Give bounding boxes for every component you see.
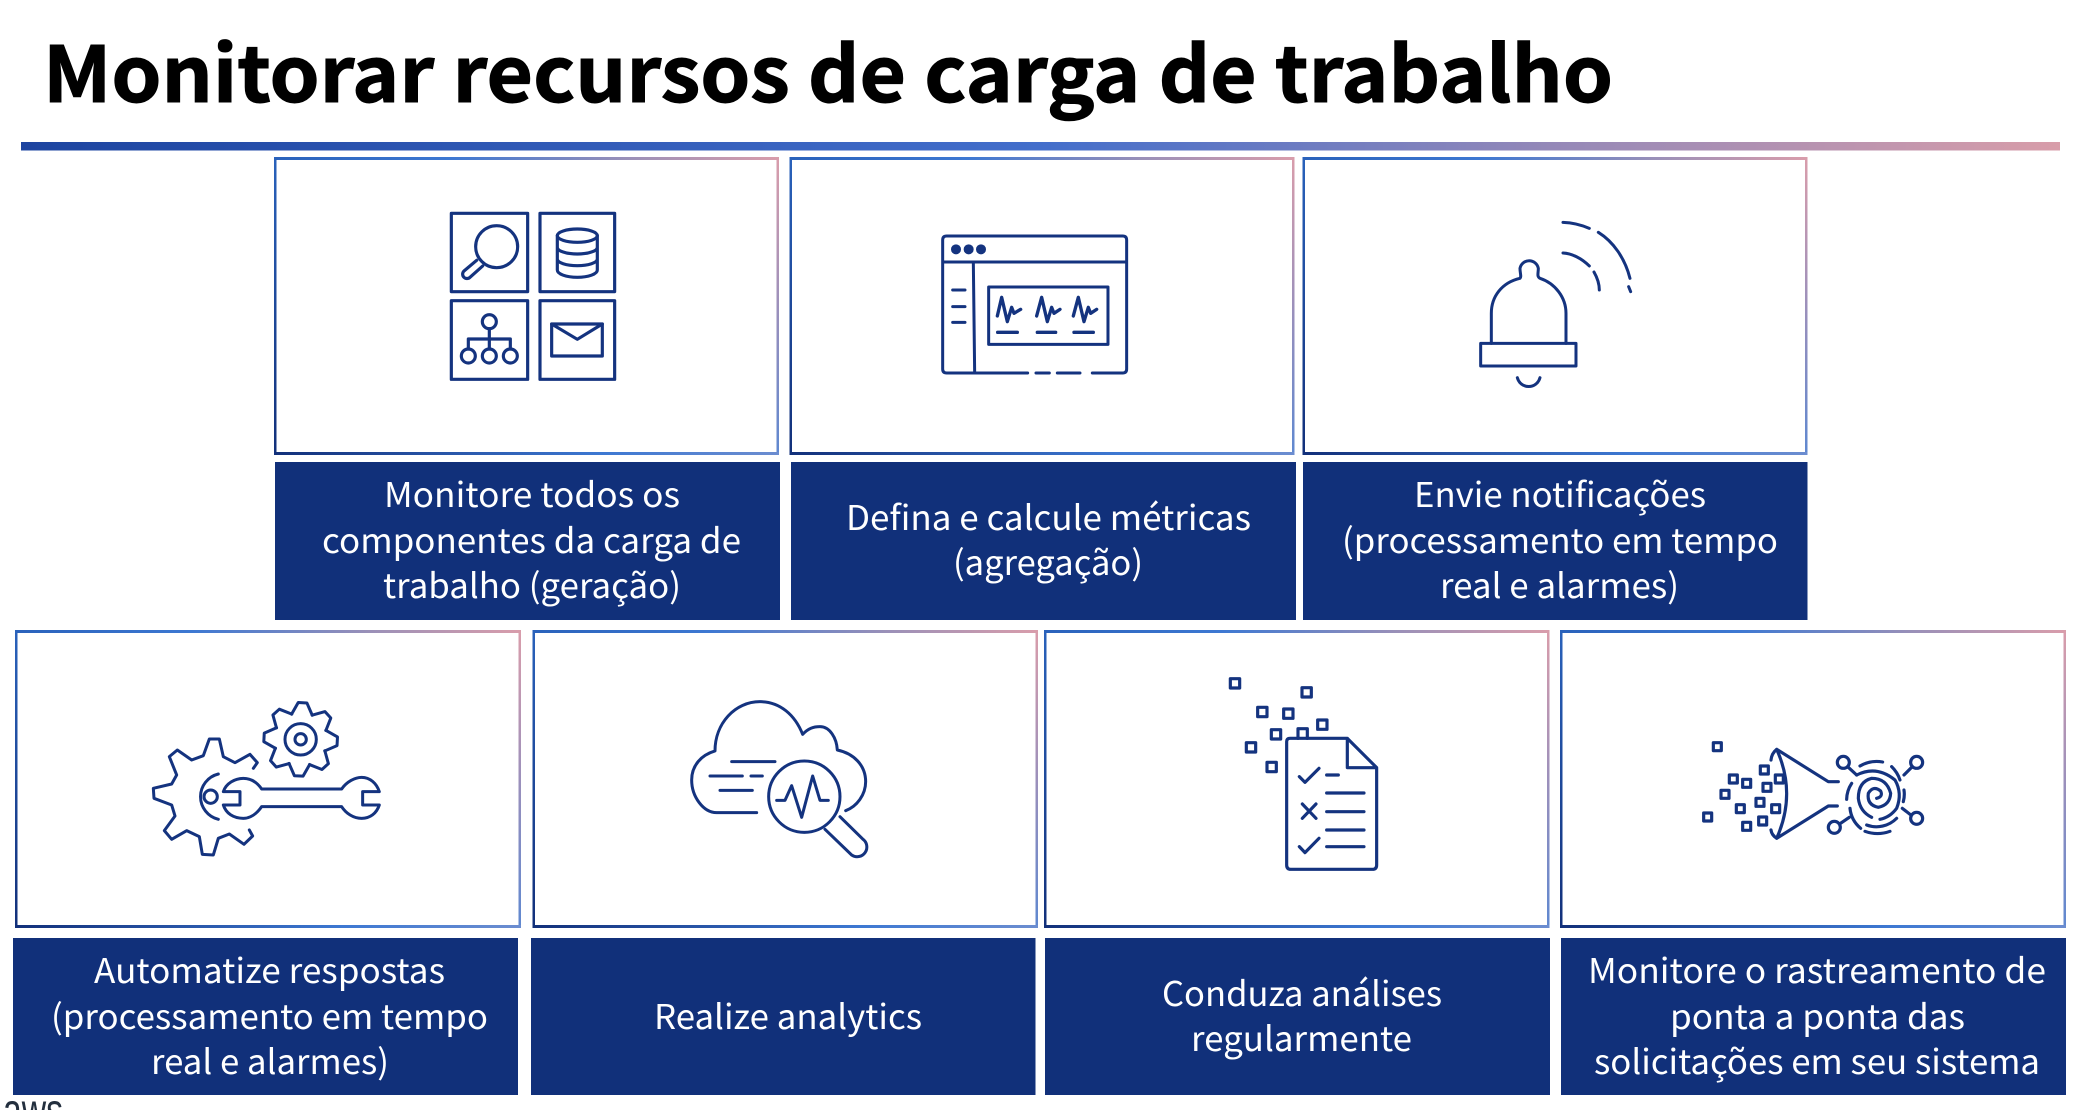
label: analytics bbox=[531, 938, 1036, 1095]
title rule bbox=[21, 142, 2060, 150]
panel: analysis icon card bbox=[1044, 630, 1550, 928]
icon: search, database, hierarchy, mail bbox=[451, 213, 615, 379]
label: regular analysis: regularmente bbox=[1191, 1012, 1412, 1061]
icon: checklist document bbox=[1230, 679, 1377, 869]
icon: ringing bell bbox=[1481, 222, 1631, 387]
label: notifications: (processamento em tempo bbox=[1342, 514, 1778, 563]
label: metrics bbox=[791, 462, 1296, 620]
label: request tracing: solicitações em seu sistema bbox=[1594, 1035, 2040, 1084]
label: monitor components: Monitore todos os bbox=[384, 468, 680, 517]
panel: notification icon card bbox=[1302, 157, 1808, 455]
panel: metrics icon card bbox=[790, 157, 1294, 455]
icon: gears and wrench bbox=[153, 701, 379, 855]
label: notifications: Envie notificações bbox=[1414, 468, 1706, 517]
label: monitor components bbox=[275, 462, 780, 620]
label: automate responses: (processamento em tempo bbox=[51, 990, 488, 1039]
label: regular analysis: Conduza análises bbox=[1162, 967, 1442, 1016]
label: request tracing: ponta a ponta das bbox=[1670, 990, 1965, 1039]
label: request tracing: Monitore o rastreamento de bbox=[1588, 944, 2046, 993]
icon: funnel and fingerprint bbox=[1704, 743, 1923, 838]
panel: automate icon card bbox=[15, 630, 521, 928]
label: request tracing bbox=[1561, 938, 2066, 1095]
icon: cloud with magnifier bbox=[692, 702, 867, 857]
label: automate responses bbox=[13, 938, 518, 1095]
panel: analytics icon card bbox=[532, 630, 1038, 928]
icon: dashboard window bbox=[943, 236, 1127, 373]
label: metrics: (agregação) bbox=[953, 536, 1143, 585]
label: monitor components: componentes da carga de bbox=[322, 514, 741, 563]
label: automate responses: Automatize respostas bbox=[94, 944, 445, 993]
label: metrics: Defina e calcule métricas bbox=[846, 491, 1251, 540]
panel: tracing icon card bbox=[1560, 630, 2066, 928]
title: Monitorar recursos de carga de trabalho bbox=[43, 14, 1613, 125]
panel: monitor components icon card bbox=[274, 157, 779, 455]
label: analytics: Realize analytics bbox=[654, 990, 922, 1039]
label: regular analysis bbox=[1045, 938, 1550, 1095]
label: monitor components: trabalho (geração) bbox=[383, 559, 681, 608]
label: notifications bbox=[1303, 462, 1808, 620]
label: notifications: real e alarmes) bbox=[1440, 559, 1679, 608]
label: automate responses: real e alarmes) bbox=[151, 1035, 389, 1084]
